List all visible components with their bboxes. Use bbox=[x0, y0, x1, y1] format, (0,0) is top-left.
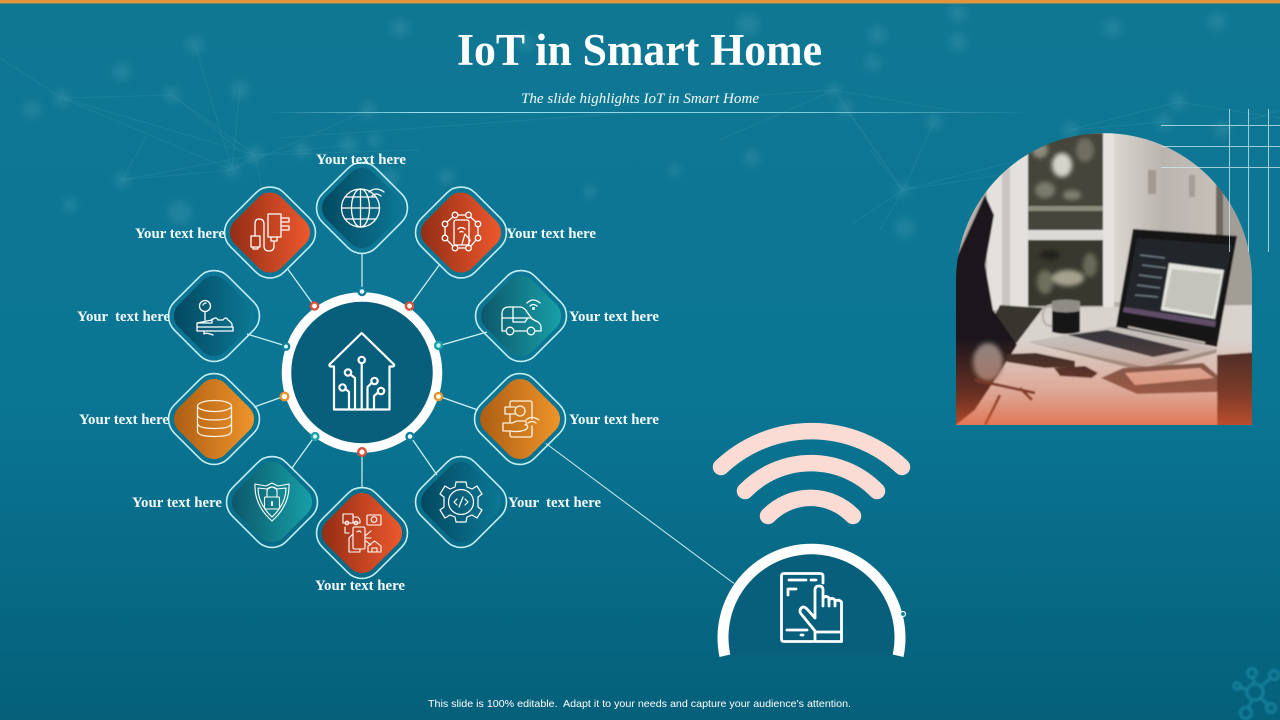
subtitle: The slide highlights IoT in Smart Home bbox=[521, 91, 759, 107]
diamond: shield with lock (bottom left) bbox=[218, 448, 326, 556]
icon: wifi arcs bbox=[721, 431, 902, 516]
background network pattern bbox=[0, 4, 1280, 238]
label: lower right: Your text here bbox=[569, 412, 659, 428]
central hub bbox=[286, 297, 438, 448]
label: top left: Your text here bbox=[135, 226, 225, 242]
diamond: power adapter (top left) bbox=[216, 179, 324, 286]
dark figure bbox=[950, 195, 1017, 430]
icon: molecule network corner bbox=[1234, 668, 1278, 718]
electronics boards bbox=[1007, 353, 1075, 368]
top accent bar bbox=[0, 0, 1280, 4]
laptop base bbox=[1028, 326, 1217, 367]
wall and curtains bbox=[958, 133, 1252, 354]
arch fill bbox=[732, 554, 891, 616]
icon: smart house with circuit bbox=[329, 333, 394, 410]
label: bottom left: Your text here bbox=[132, 495, 222, 511]
laptop screen bbox=[1116, 229, 1237, 347]
diamond: code gear (bottom right) bbox=[407, 448, 515, 556]
diamond: smartphone network (top right) bbox=[407, 179, 515, 286]
connector line to phone arch bbox=[546, 444, 734, 584]
window panes bbox=[1028, 133, 1105, 230]
header divider bbox=[270, 112, 1030, 113]
diamond: phone controlling delivery, camera, home (bottom) bbox=[308, 479, 416, 587]
label: left: Your text here bbox=[77, 309, 170, 325]
connector lines from hub to diamonds bbox=[247, 253, 487, 488]
arch dot bbox=[900, 612, 906, 616]
coffee cup bbox=[1051, 310, 1081, 335]
photo: laptop on desk bbox=[950, 130, 1260, 430]
diamond: connected car (right) bbox=[467, 262, 575, 370]
hub ring bbox=[286, 297, 438, 448]
arch ring bbox=[718, 544, 905, 657]
plant stems bbox=[975, 380, 1035, 425]
label: bottom right: Your text here bbox=[508, 495, 601, 511]
label: right: Your text here bbox=[569, 309, 659, 325]
diamond: globe with wifi (top) bbox=[308, 154, 416, 262]
blurred plant shadow bbox=[973, 343, 1003, 381]
phone and notebook bbox=[1101, 363, 1217, 394]
phone arch bbox=[718, 544, 906, 657]
label: top right: Your text here bbox=[506, 226, 596, 242]
diamond: joystick (left) bbox=[160, 262, 268, 370]
label: top: Your text here bbox=[316, 152, 406, 168]
warm colour overlay bbox=[956, 345, 1252, 425]
decorative grid top right bbox=[1161, 109, 1280, 252]
icon: phone with pointing hand bbox=[782, 574, 842, 642]
diamond: database (lower left) bbox=[160, 365, 268, 473]
table bbox=[950, 305, 1252, 430]
footer note: This slide is 100% editable. Adapt it to your needs and capture your audience's attention. bbox=[428, 698, 851, 710]
label: lower left: Your text here bbox=[79, 412, 169, 428]
label: bottom: Your text here bbox=[315, 578, 405, 594]
diamond: smart door lock (lower right) bbox=[466, 365, 574, 473]
title: IoT in Smart Home bbox=[457, 25, 822, 75]
hub connector dots bbox=[281, 288, 442, 456]
